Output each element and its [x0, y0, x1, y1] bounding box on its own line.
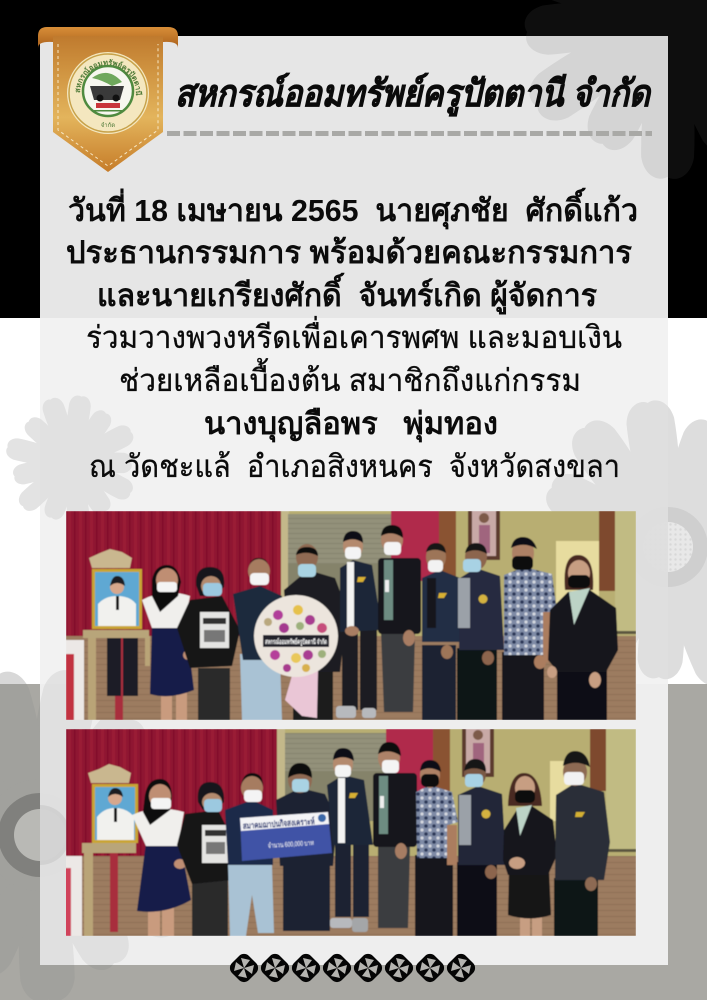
photo 1 man in black jacket [378, 525, 421, 712]
photo 1 man in navy jacket with glasses [422, 543, 460, 720]
line 5: ช่วยเหลือเบื้องต้น สมาชิกถึงแก่กรรม [119, 358, 581, 398]
photo 2 man with white shirt, navy jacket [327, 748, 373, 932]
cheque amount: จำนวน 600,000 บาท [268, 839, 314, 850]
body text block [66, 187, 638, 484]
dashed divider [167, 131, 652, 136]
line 4: ร่วมวางพวงหรีดเพื่อเคารพศพ และมอบเงิน [86, 316, 622, 355]
photo 2 man in batik shirt [415, 760, 458, 936]
photo 1 woman in white blouse [142, 565, 194, 720]
photo 2: handing over the funeral benefit [65, 729, 636, 936]
line 3: และนายเกรียงศักดิ์ จันทร์เกิด ผู้จัดการ [97, 272, 597, 315]
logo: cannon [90, 86, 124, 100]
photo 2 portrait on easel [82, 764, 138, 936]
flower: top right, behind panel [468, 0, 707, 218]
flower: left side [6, 417, 40, 511]
ornament 2 [258, 951, 292, 985]
photo 1 man in batik shirt [502, 537, 557, 720]
photo 2 background [66, 729, 636, 936]
photo 1 man in navy jacket, blue mask [457, 543, 504, 720]
wreath banner: สหกรณ์ออมทรัพย์ครูปัตตานี จำกัด [265, 637, 327, 647]
photo 2 man in navy jacket, blue mask [457, 759, 506, 936]
ribbon badge with logo [38, 27, 178, 172]
line 2: ประธานกรรมการ พร้อมด้วยคณะกรรมการ [66, 235, 632, 270]
line 1: วันที่ 18 เมษายน 2565 นายศุภชัย ศักดิ์แก้ว [68, 187, 638, 230]
ornament 4 [320, 951, 354, 985]
ornament 5 [351, 951, 385, 985]
photo 2 big cheque [240, 812, 332, 861]
ornament 8 [444, 951, 478, 985]
ornament 3 [289, 951, 323, 985]
photo 2 memorial stand [65, 856, 82, 936]
line 7: ณ วัดชะแล้ อำเภอสิงหนคร จังหวัดสงขลา [89, 449, 620, 484]
title: สหกรณ์ออมทรัพย์ครูปัตตานี จำกัด [175, 72, 652, 117]
ornament 7 [413, 951, 447, 985]
photo 1 memorial stand [66, 640, 84, 720]
photo 2 person in black print tee [177, 782, 233, 936]
ribbon top fold [38, 27, 178, 48]
ornament 1 [227, 951, 261, 985]
photo 1 man in navy t-shirt and jeans [233, 558, 282, 720]
photo 2 woman in white blouse [132, 779, 191, 936]
ribbon body [53, 36, 163, 172]
background: grey lower band [0, 684, 707, 1000]
flower: bottom left on white band [0, 672, 26, 684]
photo 2 man in black jacket [373, 742, 417, 928]
photo 1 person in black print tee [177, 567, 240, 720]
background: white middle band [0, 318, 707, 684]
photo 1 flower wreath [254, 595, 338, 718]
photo 1 man holding wreath [284, 544, 347, 720]
flower: right side [668, 406, 707, 684]
photo 1 woman in black blazer [547, 555, 618, 720]
photo 1 background [66, 511, 636, 720]
cheque heading: สมาคมฌาปนกิจสงเคราะห์ [242, 815, 315, 831]
photo 2 man holding cheque [276, 763, 337, 931]
footer ornaments [227, 951, 478, 985]
logo: seal suffix: จำกัด [101, 122, 115, 129]
flower: bottom left on grey band [0, 686, 92, 1000]
background: black upper band [0, 0, 707, 318]
flower: right side on grey band [500, 381, 707, 715]
photo 1: laying the funeral wreath [66, 511, 636, 720]
photo 1 man with white shirt, navy jacket [336, 531, 382, 718]
photo 2 man in navy tee and jeans [225, 773, 274, 936]
photo 1 portrait on easel [83, 549, 150, 720]
photo 2 man with glasses in dark jacket [554, 751, 610, 936]
line 6: deceased member name: นางบุญลือพร พุ่มทอง [204, 406, 498, 443]
ornament 6 [382, 951, 416, 985]
ribbon stitching [58, 44, 158, 166]
logo: seal name: สหกรณ์ออมทรัพย์ครูปัตตานี [76, 59, 142, 96]
logo: cooperative seal [67, 52, 149, 134]
photo 2 woman in black blazer [503, 773, 557, 936]
